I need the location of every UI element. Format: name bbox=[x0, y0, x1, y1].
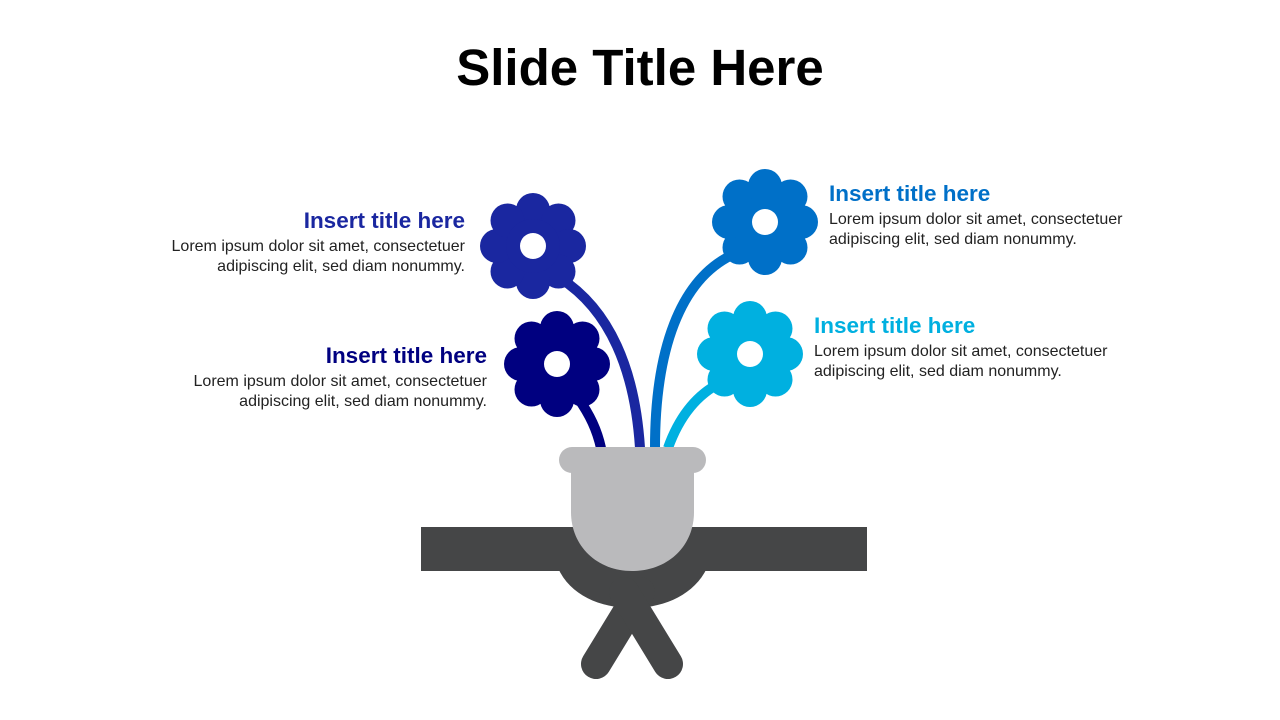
text block: top left bbox=[172, 208, 465, 275]
text: Insert title here bbox=[829, 181, 990, 206]
stems bbox=[560, 255, 732, 448]
text: Lorem ipsum dolor sit amet, consectetuer bbox=[829, 211, 1122, 228]
text: Insert title here bbox=[326, 343, 487, 368]
flower 1 bbox=[480, 193, 586, 299]
text: Lorem ipsum dolor sit amet, consectetuer bbox=[194, 373, 487, 390]
text: Insert title here bbox=[304, 208, 465, 233]
table bbox=[421, 527, 867, 664]
text block: bottom left bbox=[194, 343, 487, 410]
flower 4 bbox=[697, 301, 803, 407]
vase bbox=[559, 447, 706, 571]
flower 3 bbox=[712, 169, 818, 275]
title: Slide Title Here bbox=[456, 39, 824, 96]
text: adipiscing elit, sed diam nonummy. bbox=[829, 231, 1077, 248]
flower 2 bbox=[504, 311, 610, 417]
text: Lorem ipsum dolor sit amet, consectetuer bbox=[172, 238, 465, 255]
text: adipiscing elit, sed diam nonummy. bbox=[814, 363, 1062, 380]
text: adipiscing elit, sed diam nonummy. bbox=[239, 393, 487, 410]
text: Insert title here bbox=[814, 313, 975, 338]
text: Lorem ipsum dolor sit amet, consectetuer bbox=[814, 343, 1107, 360]
text: adipiscing elit, sed diam nonummy. bbox=[217, 258, 465, 275]
text block: bottom right bbox=[814, 313, 1108, 380]
text block: top right bbox=[829, 181, 1122, 248]
